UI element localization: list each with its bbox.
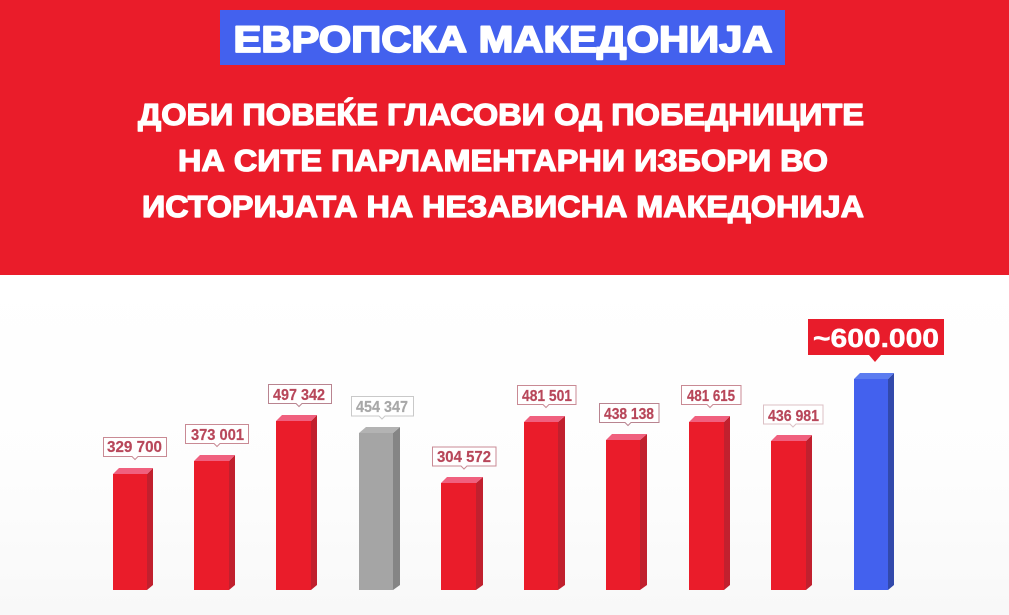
title badge — [220, 10, 785, 65]
title badge: ЕВРОПСКА МАКЕДОНИЈА — [234, 19, 772, 60]
bar 497 342: 497 342 — [273, 387, 325, 404]
bar 304 572 — [432, 447, 496, 590]
bar 438 138 — [600, 404, 659, 590]
bar 438 138: 438 138 — [604, 406, 654, 423]
bar 481 501 — [518, 386, 576, 590]
bar 454 347 (grey) — [352, 396, 414, 590]
headline text — [138, 97, 864, 224]
bar 304 572: 304 572 — [437, 449, 491, 466]
bar 436 981 — [764, 405, 823, 590]
chart background — [0, 275, 1009, 615]
bar 329 700 — [104, 438, 166, 590]
bar 329 700: 329 700 — [107, 439, 162, 456]
bar 481 615: 481 615 — [687, 388, 735, 405]
bar 497 342 — [268, 384, 332, 590]
bar chart — [104, 319, 944, 590]
bar 481 501: 481 501 — [522, 388, 572, 405]
bar 454 347 (grey): 454 347 — [356, 399, 408, 416]
headline text: НА СИТЕ ПАРЛАМЕНТАРНИ ИЗБОРИ ВО — [178, 143, 828, 178]
bar 373 001: 373 001 — [191, 427, 244, 444]
headline text: ДОБИ ПОВЕЌЕ ГЛАСОВИ ОД ПОБЕДНИЦИТЕ — [138, 97, 864, 132]
headline text: ИСТОРИЈАТА НА НЕЗАВИСНА МАКЕДОНИЈА — [142, 189, 864, 224]
bar 436 981: 436 981 — [768, 408, 819, 425]
header band — [0, 0, 1009, 275]
bar ~600.000 (blue) — [808, 319, 944, 590]
bar ~600.000 (blue): ~600.000 — [813, 323, 939, 353]
bar 373 001 — [186, 424, 248, 590]
bar 481 615 — [682, 386, 741, 590]
